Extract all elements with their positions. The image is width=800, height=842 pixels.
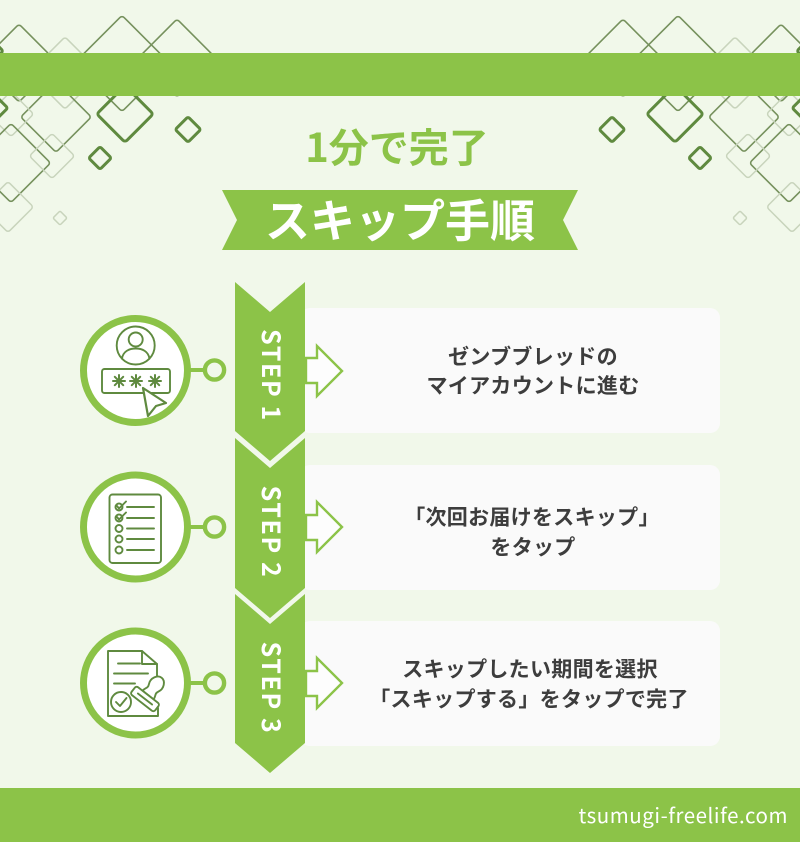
chevron: step 2 <box>235 438 305 618</box>
chevron: step 3: STEP 3 <box>254 642 290 734</box>
step 3 text: 「スキップする」をタップで完了 <box>369 684 689 714</box>
step 2 text: をタップ <box>490 532 576 562</box>
decorative diamonds right <box>584 15 800 232</box>
arrow: step 1 <box>306 346 342 396</box>
step 2 text: 「次回お届けをスキップ」 <box>404 502 660 532</box>
panel: step 2 card <box>300 465 720 590</box>
decorative diamonds left <box>0 15 216 232</box>
panel: step 1 card <box>300 308 720 433</box>
top green band <box>0 53 800 96</box>
connector: step 3 <box>188 673 224 693</box>
chevron: step 2: STEP 2 <box>254 486 290 578</box>
step 1 text: ゼンブブレッドの <box>448 341 618 371</box>
icon: account login <box>84 318 188 422</box>
chevron: step 1 <box>235 282 305 461</box>
arrow: step 3 <box>306 658 342 708</box>
step 1 text: マイアカウントに進む <box>426 370 640 400</box>
site url: tsumugi-freelife.com <box>579 799 788 829</box>
chevron: step 1: STEP 1 <box>254 329 290 422</box>
bottom green band <box>0 788 800 842</box>
arrow: step 2 <box>306 502 342 552</box>
step 3 text: スキップしたい期間を選択 <box>402 654 658 684</box>
icon: checklist <box>84 475 188 579</box>
panel: step 3 card <box>300 621 720 746</box>
connector: step 2 <box>188 517 224 537</box>
ribbon heading: スキップ手順: スキップ手順 <box>265 185 535 250</box>
chevron: step 3 <box>235 594 305 773</box>
icon: document with stamp <box>84 631 188 735</box>
connector: step 1 <box>188 360 224 380</box>
title: 1分で完了: 1分で完了 <box>305 116 489 174</box>
